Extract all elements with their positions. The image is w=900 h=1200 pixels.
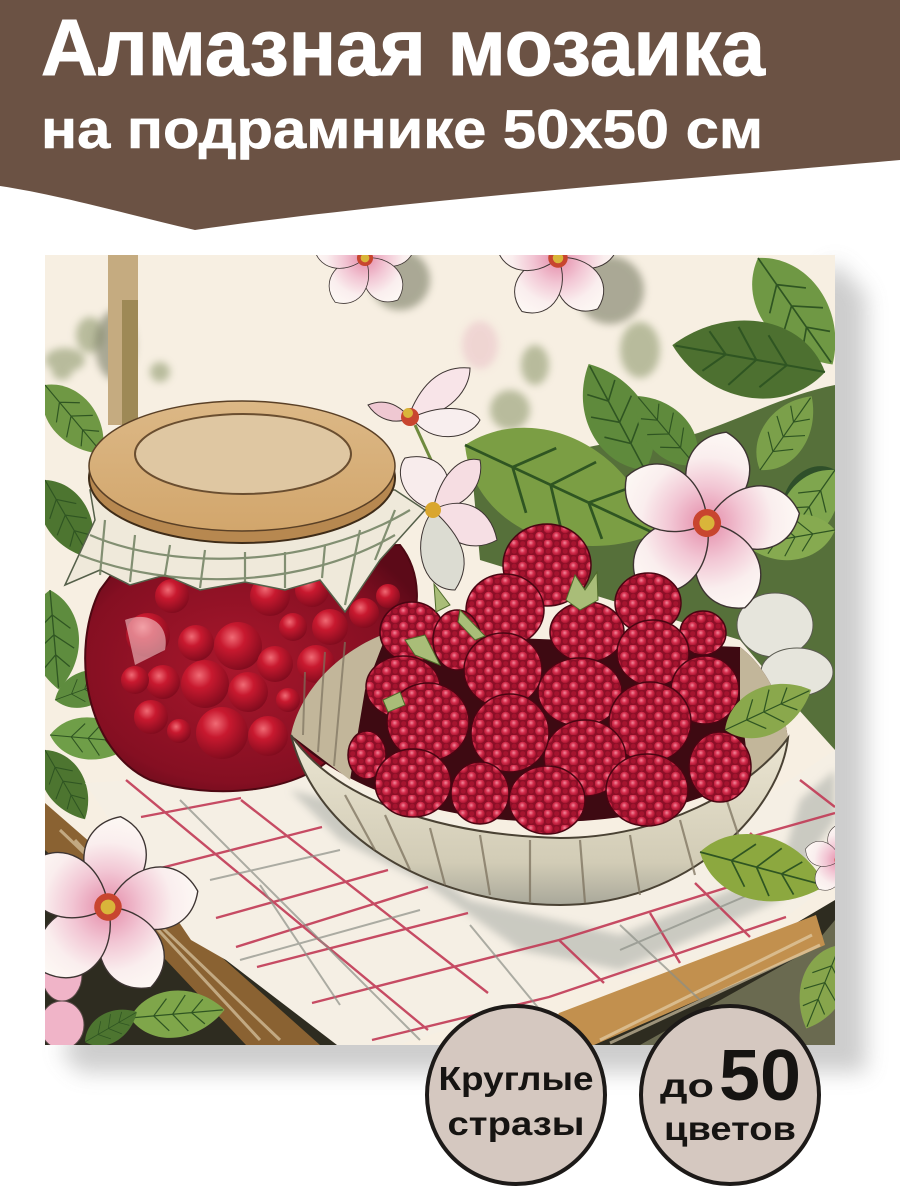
cloth shadows — [290, 770, 835, 970]
small pink flower right — [805, 826, 835, 890]
wooden table — [45, 803, 825, 1045]
wall stains — [45, 250, 660, 430]
left foliage — [45, 384, 116, 820]
badge: round rhinestones: Круглые — [438, 1060, 594, 1097]
cloth check lines — [126, 780, 835, 1040]
flower behind jar — [400, 457, 497, 590]
bottom left leaves — [85, 990, 224, 1045]
header banner — [0, 0, 900, 230]
tablecloth — [85, 750, 835, 1045]
gingham cloth — [65, 490, 425, 612]
jar highlight — [125, 617, 166, 665]
small pink bloom — [45, 974, 84, 1045]
lower left flower — [45, 816, 198, 989]
painting canvas — [45, 255, 835, 1045]
wooden post — [108, 255, 138, 425]
upper right foliage — [464, 258, 835, 750]
white petals right of bowl — [737, 593, 833, 696]
raspberry sepals — [383, 572, 598, 712]
badge: up to 50 colours — [641, 1006, 819, 1184]
jar body — [85, 545, 417, 791]
lower right backdrop — [640, 920, 835, 1045]
jam cherries — [121, 573, 400, 759]
badge: up to 50 colours: цветов — [664, 1110, 796, 1147]
raspberries — [348, 524, 751, 834]
badge: up to 50 colours: 50 — [719, 1036, 801, 1116]
bowl body — [291, 735, 788, 905]
badge: up to 50 colours: до — [660, 1067, 714, 1104]
bowl — [291, 633, 788, 905]
bowl interior — [291, 633, 788, 822]
badge: round rhinestones — [427, 1006, 605, 1184]
badge: round rhinestones: стразы — [448, 1105, 584, 1142]
lower right leaves — [700, 834, 835, 1028]
wooden lid — [88, 470, 396, 544]
painting background wall — [45, 255, 835, 1045]
leaf by bowl — [724, 684, 811, 738]
top flowers — [316, 255, 614, 314]
subtitle: на подрамнике 50х50 см — [41, 98, 763, 160]
flower on stem — [368, 368, 480, 462]
jam jar — [65, 401, 425, 791]
dark table underside — [45, 850, 835, 1045]
large flower — [624, 432, 800, 609]
canvas shadow — [60, 262, 866, 1072]
inner bowl wall — [291, 633, 387, 780]
title: Алмазная мозаика — [41, 3, 765, 92]
